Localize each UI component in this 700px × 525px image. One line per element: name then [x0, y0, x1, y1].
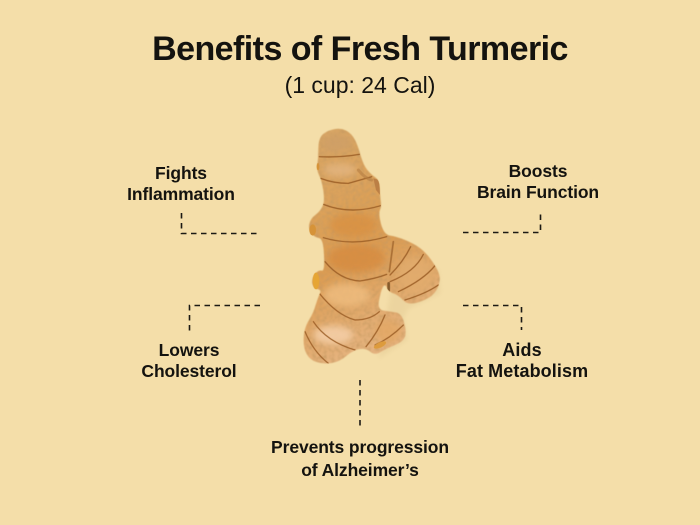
label: prevents progression of Alzheimer's: Prevents progression	[271, 437, 449, 457]
connector: fights inflammation	[182, 213, 260, 234]
label: lowers cholesterol	[141, 340, 237, 381]
label: lowers cholesterol: Lowers	[159, 340, 219, 360]
ridge lines	[305, 154, 438, 363]
connector: lowers cholesterol	[190, 306, 260, 332]
connector: aids fat metabolism	[463, 306, 522, 330]
label: prevents progression of Alzheimer's: of Alzheimer’s	[301, 460, 419, 480]
label: boosts brain function: Boosts	[509, 161, 567, 181]
connector: boosts brain function	[463, 212, 540, 232]
label: fights inflammation	[127, 163, 235, 204]
label: boosts brain function	[477, 161, 599, 202]
orange nubs	[309, 163, 387, 350]
title: Benefits of Fresh Turmeric	[152, 30, 568, 68]
label: prevents progression of Alzheimer's	[271, 437, 449, 480]
label: aids fat metabolism: Fat Metabolism	[456, 361, 588, 381]
label: fights inflammation: Inflammation	[127, 184, 235, 204]
icon: turmeric root	[304, 129, 440, 363]
label: lowers cholesterol: Cholesterol	[141, 361, 237, 381]
label: fights inflammation: Fights	[155, 163, 207, 183]
subtitle: serving size: (1 cup: 24 Cal)	[285, 72, 435, 98]
connector: prevents progression	[359, 380, 361, 428]
label: aids fat metabolism: Aids	[502, 340, 542, 360]
label: boosts brain function: Brain Function	[477, 182, 599, 202]
label: aids fat metabolism	[456, 340, 588, 381]
